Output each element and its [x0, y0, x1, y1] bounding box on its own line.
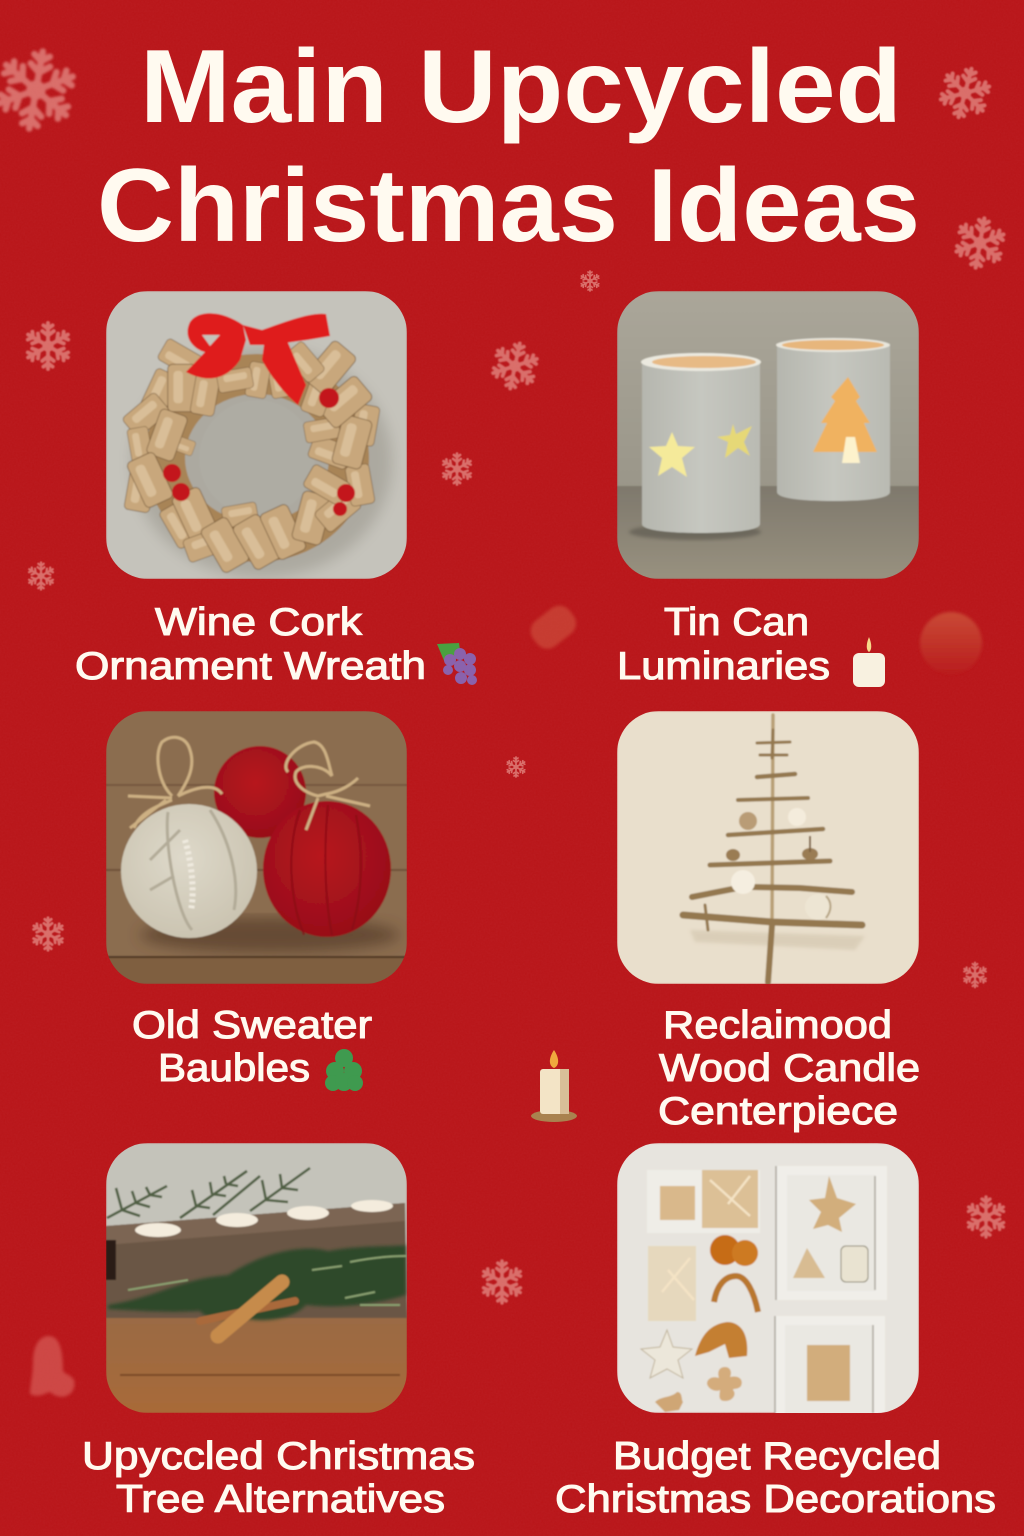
- panel: wood candle log photo: [106, 1143, 407, 1413]
- caption: reclaimood wood candle centerpiece: Centerpiece: [658, 1090, 898, 1133]
- panel: old sweater baubles photo: [106, 711, 407, 984]
- red berries: [163, 388, 355, 516]
- caption: budget recycled decorations: Budget Recycled: [613, 1435, 941, 1478]
- caption: old sweater baubles: Old Sweater: [132, 1004, 372, 1047]
- caption: upcycled tree alternatives: Tree Alternatives: [116, 1478, 445, 1521]
- caption: old sweater baubles: [132, 1004, 372, 1091]
- panel: branch tree photo: [617, 711, 919, 984]
- caption: upcycled tree alternatives: [82, 1435, 475, 1521]
- caption: upcycled tree alternatives: Upyccled Christmas: [82, 1435, 475, 1478]
- decorative faded bauble: [920, 612, 982, 674]
- left can: [641, 353, 761, 533]
- decorative faded bell: [30, 1336, 75, 1397]
- evergreen garland: [108, 1245, 406, 1320]
- hanging ornaments: [726, 808, 831, 920]
- kraft paper crafts: [660, 1170, 868, 1401]
- wreath corks: [122, 338, 380, 574]
- decorative faded cork: [525, 600, 581, 654]
- caption: tin can luminaries: Luminaries: [617, 645, 830, 688]
- icon: green tree: [325, 1049, 363, 1091]
- title: Main Upcycled: [140, 29, 902, 145]
- twine bows: [128, 737, 370, 830]
- cinnamon sticks: [200, 1282, 295, 1336]
- tealight candles: [135, 1200, 393, 1237]
- caption: wine cork ornament wreath: Ornament Wreath: [75, 645, 426, 688]
- title: Christmas Ideas: [97, 148, 920, 264]
- panel: wine cork wreath photo: [106, 291, 407, 579]
- panel: budget recycled decorations photo: [617, 1143, 919, 1416]
- red ribbon bow: [186, 313, 330, 405]
- picture frames: [647, 1166, 887, 1416]
- caption: wine cork ornament wreath: [75, 601, 477, 688]
- caption: reclaimood wood candle centerpiece: Reclaimood: [663, 1004, 892, 1047]
- caption: reclaimood wood candle centerpiece: [658, 1004, 920, 1133]
- caption: tin can luminaries: Tin Can: [664, 601, 809, 644]
- caption: wine cork ornament wreath: Wine Cork: [155, 601, 363, 644]
- caption: tin can luminaries: [617, 601, 885, 688]
- caption: budget recycled decorations: Christmas Decorations: [555, 1478, 996, 1521]
- panel: tin can luminaries photo: [617, 291, 919, 579]
- caption: reclaimood wood candle centerpiece: Wood Candle: [659, 1047, 920, 1090]
- icon: candle: [853, 637, 885, 687]
- evergreen sprigs: [107, 1168, 310, 1218]
- title: [97, 29, 920, 264]
- right can: [776, 338, 890, 501]
- caption: old sweater baubles: Baubles: [158, 1047, 310, 1090]
- icon: grapes: [437, 643, 477, 685]
- decorative candle: [531, 1050, 577, 1122]
- caption: budget recycled decorations: [555, 1435, 996, 1521]
